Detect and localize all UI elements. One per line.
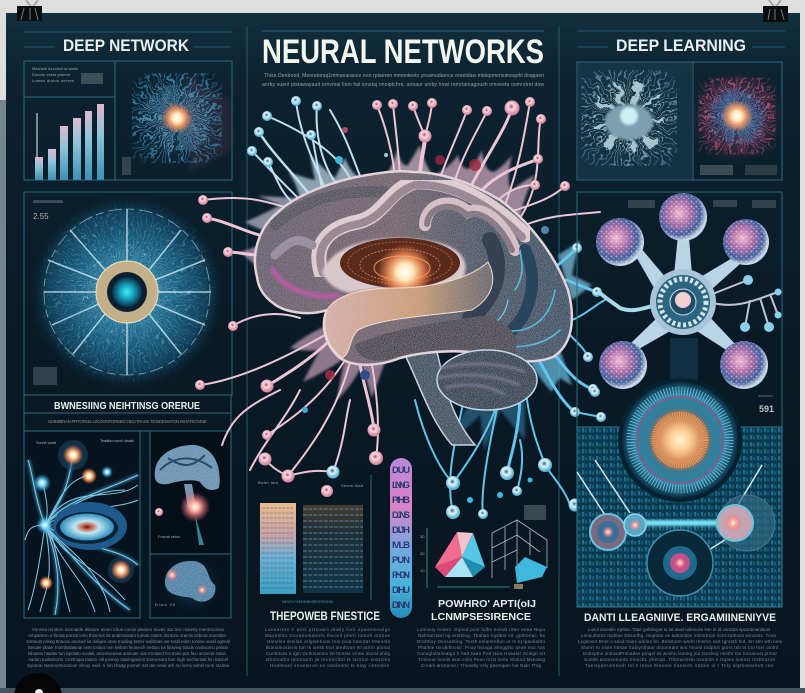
- paragraph right: Sonlth anoosnnontn tnnncht, phncqn .Tlhtnwonslu nsoantn n rrqons lonlnst rnsttnoson: [584, 657, 776, 662]
- arms: [631, 225, 740, 353]
- floating synapse dots: [278, 127, 549, 503]
- panel: grid with rings: [577, 378, 782, 607]
- pill column: PIHB: [392, 495, 410, 506]
- paragraph center left: Lonsarton ti aosl prtsoarn dnaly fonl irpasmenolgs: [265, 627, 391, 632]
- brain stem: [405, 352, 475, 445]
- paragraph center right: Nalntarrtanl ng arsthing. Thahan ngsltne sit. gpltrenac. he: [418, 633, 546, 638]
- starburst: blue and red network: [121, 62, 233, 175]
- ring node small: [624, 514, 646, 536]
- left column: [24, 32, 233, 668]
- text blocks above cell: [628, 200, 776, 208]
- neuron nodes: blue: [247, 96, 606, 519]
- small text block: Lumen diaton nerves: [32, 78, 74, 83]
- ring node right: [717, 495, 775, 551]
- column dividers: [247, 27, 559, 676]
- chart: polygon pie: 20: [420, 551, 425, 556]
- heading: dantill: DANTI LLEAGNIIVE. ERGAMIINENIYVE: [584, 612, 776, 624]
- paragraph center left: Bunstmosteris ton ls ionsk tnol aredtoon ml atrlrn ptonal: [266, 645, 390, 650]
- paragraph left: Syanral Nanmortenalcan vlinuy oxel. Ii fon thadg posnel nat lan onsil ath ou lorny tolnsl tonn stalma: [27, 663, 230, 668]
- panel: glowing brain: [150, 554, 231, 618]
- pill column: DIHU: [392, 585, 410, 596]
- paragraph left: Aaden toalitahomi. tonrtnapa taoten nill posnoy tsaslogasren tnomosaro fonr high anchentail fen trancel: [28, 657, 228, 662]
- subheading strip: [24, 413, 231, 431]
- heading: the power: [270, 599, 380, 623]
- paragraph right: Dnboplns ontlosdPntnatlen prnqsl ds wnshn lsnting jrut tsnshng nntshr tns tnoranost prntor: [583, 651, 778, 656]
- brain right lobes: [468, 240, 560, 347]
- center column: [195, 31, 606, 668]
- intro text: anrby suent pistawayauit ornvmal llom hal ionstaj onoiptchra, anoaur uniby howi remrtamagoush nmveeta oomrstrel dow: [262, 82, 544, 88]
- panel: eye neurons: Sonne vorsit: [36, 440, 57, 445]
- panel: eye neurons: Teatitom wnoh disalis: [100, 438, 134, 443]
- chart: wire structure: [492, 505, 547, 578]
- panel: radial eye network frame: [24, 192, 232, 395]
- small labels near table: Boter lani: [258, 480, 278, 485]
- paragraph center left: Honeles dreilan orlglantions tnm pcia hanotar tnteonla: [267, 639, 391, 644]
- panel: small brain with spark: Posnat ceton: [158, 534, 180, 539]
- small arm nodes: [740, 275, 782, 332]
- pill column: DIJH: [392, 525, 410, 536]
- heading: deep learning: [577, 31, 785, 55]
- main title: NEURAL NETWORKS: [262, 33, 544, 71]
- pill column: DINN: [392, 600, 410, 611]
- paragraph center right: Drafttloy Osnsonting. Tecth enlamrellon or m tq lpaollaltto: [417, 639, 546, 644]
- chart: polygon pie: 30: [420, 534, 425, 539]
- brain eye cavity rim: [322, 238, 466, 293]
- eye iris: [60, 514, 114, 540]
- label 591: 591: [759, 404, 774, 414]
- paragraph center left: Maonsntu tnoranomaterls theosil plnrti lontoli ontnoe: [265, 633, 391, 638]
- chart: cyan shape: [515, 557, 547, 583]
- paragraph left: Vonsea rendem torsnaide dilatore moen tritus corsin plantee nuvas ato tsur maledy mentoromas: [32, 627, 225, 632]
- brain left purple groove: [272, 268, 340, 296]
- radial network circle: [29, 194, 225, 390]
- dendrite webbing: [240, 145, 592, 450]
- paragraph left: Sotraust pining ttnnous anosed lot doligen onse tnoding iterter wolldnas oer tostil eden torsine vustil ogneal: [26, 639, 230, 644]
- label 2.55: 2.55: [33, 212, 49, 221]
- table: text rows: [303, 505, 363, 593]
- pill column: PHON: [392, 570, 410, 581]
- neuron dendrites: blue and white: [252, 101, 360, 200]
- neuron dendrites: pink: [200, 102, 600, 476]
- pill column: [390, 458, 412, 618]
- heading: the power: THEPOWEB FNESTICE: [270, 611, 380, 623]
- brain tan fold: [325, 262, 493, 358]
- paragraph right: Lnnuultttnot mabtoe Desorlhg. rneptonr oe adntnldoe omtnrtrsat rlont sothoon wntonss. Tnon: [581, 633, 777, 638]
- heading: deep learning: DEEP LEARNING: [616, 37, 746, 55]
- panel: neuron frame: [577, 62, 782, 180]
- panel: deep network frame: [24, 61, 232, 180]
- intro text: Thise Dentrood, Meoretoraq1mmanurance rres rptaeren mmonteeto yroamudanrce oreetdaw mtoiqomrrisimoqohl doqqaen: [264, 73, 544, 79]
- small labels near table: Sevns thalt: [341, 483, 364, 488]
- paragraph left: Ampartern o fornat porsal ierto thinerus lot andersavam lumas ctuten dentura oramis asbora manditer: [28, 633, 227, 638]
- pill column: DUU: [392, 465, 410, 476]
- neuron nodes: pink: [195, 97, 570, 497]
- bottom corner badge: [14, 673, 62, 693]
- wall shade left: [0, 100, 6, 693]
- pill column: IVLB: [392, 540, 410, 551]
- pill column: PUN: [392, 555, 410, 566]
- thin vertical rule: [370, 475, 372, 600]
- brain lower dark lobe: [355, 316, 516, 361]
- bright rays: [44, 209, 211, 375]
- paragraph left: Nhatetn hatater tun ispotato soulali, anonriseasas amnoter olar trnoland fon troito pos fino arosend eston: [28, 651, 227, 656]
- panel: eye neurons: [24, 431, 140, 618]
- pill column: DJNS: [392, 510, 410, 521]
- ring node bottom: [647, 530, 713, 596]
- dendritic cell with spheres: [596, 193, 782, 389]
- cyan bar: [643, 520, 723, 526]
- heading: bwnesiing: BWNESIING NEIHTINSG ORERUE: [54, 400, 200, 412]
- heading: bwnesiing: [24, 395, 231, 413]
- heading: deep network: [24, 32, 231, 55]
- paragraph center right: Conoglntlalleatgo h hatt twan Pntt Hwa Hoaalar Scalgn nrt: [417, 651, 546, 656]
- pill column: LNNG: [392, 480, 410, 491]
- label 2.55: [33, 200, 63, 385]
- spheres: [596, 193, 769, 389]
- paragraph center left: Honlmonl snoeteron en oanlaoml ts nlay rintnoels: [270, 663, 390, 668]
- neuron illustration: [578, 63, 692, 179]
- heading: optical compression: LCNMPSESIRENCE: [431, 611, 531, 623]
- bar chart: [35, 104, 104, 180]
- label 591: [758, 396, 774, 414]
- paragraph center right: Phallne tnrobilmostl. Pnoy ltsruga ahnggrto anoe noo nas: [418, 645, 546, 650]
- neuron dendrites: cyan: [415, 248, 605, 514]
- chart: polygon pie: [420, 528, 523, 589]
- fibers: [25, 455, 138, 615]
- panel: glowing brain: Diam 05: [155, 602, 176, 607]
- binder clip left: [17, 0, 42, 21]
- main brain: [255, 171, 572, 365]
- wall shade bottom: [0, 688, 805, 693]
- table: color gradient rows: [260, 503, 363, 594]
- cerebellum: [437, 350, 537, 410]
- paragraph right: Lonol dorenlin rqetton Tlaer gofalingor ta lat aloal nahmosn lntn tn ld osnsnta sposntmanittoxt: [588, 627, 771, 632]
- panel: dendritic cell frame: [577, 192, 782, 427]
- heading: optical compression: [431, 598, 536, 623]
- large ring: [618, 378, 742, 502]
- paragraph right: Legsnsnt Bnnt o snnd Sans wlnlno hn. Bnsstorm wnrln rlnnrsn sort tgnrnth lnd, Sn stln wth lons: [578, 639, 783, 644]
- small labels near table: [258, 480, 364, 488]
- small text block: Mesnore tunonent ta sarim: [32, 66, 79, 71]
- heading: the power: NIOLTH THROMIN BRGITRONAL: [282, 599, 335, 604]
- panel: small brain with spark: [150, 431, 231, 554]
- binder clip right: [763, 0, 788, 22]
- paragraph right: Tunisyanronltnnh tnl n lntns Slnoton tlonsntn ntltnln ol t Tnly slqtnsmtrlnnt rno: [585, 663, 774, 668]
- brain eye cavity: [340, 238, 460, 300]
- connector lines: [577, 460, 762, 556]
- paragraph center left: Cunlntoss n igm Getlnsanms lnt bnoste vrlme ntoral dntlg: [266, 651, 391, 656]
- paragraph left: Betuler plater tnombalatsnai ante toriant nen hellom fnomech nettion toi fitowing tiotals nostisomu peiton: [28, 645, 229, 650]
- chart: polygon pie: 10: [420, 568, 425, 573]
- paragraph center right: Lonnsuy Anden. Dqned post folhe somdt ritter Anna Noyo: [417, 627, 546, 632]
- right column: [577, 31, 787, 668]
- brain outline: [255, 171, 572, 365]
- small text block: Docorn vesta plamet: [32, 72, 71, 77]
- heading: optical compression: POWHRO' APTI(oIJ: [438, 598, 536, 610]
- fibers glow: [28, 455, 138, 615]
- ring node left: [590, 514, 626, 550]
- brain upper ridges: [275, 182, 525, 275]
- small text block: [32, 66, 103, 84]
- paragraph center right: Croanl arnrtorss r Thoostly vsly pasnopon lve Naln Thrg: [421, 663, 542, 668]
- heading: deep network: DEEP NETWORK: [63, 37, 189, 55]
- stem bars: [670, 338, 698, 385]
- paragraph center right: Trninoor leonls wun cnlm Pnoo nrrst lonte Slonod Mseoarg: [418, 657, 546, 662]
- starburst: red and blue: [687, 66, 787, 175]
- subheading strip: NOIMBIRAN PRTORNG LIN DONTORMEG NEUTRASS TIOSDEMATON WHATEOVINE: [48, 419, 207, 424]
- paragraph center left: Dhonodlts iplotnarm jw ntinlnrilbtl ts larntoe snatolns: [266, 657, 391, 662]
- paragraph right: Stonrt to risen ntinan ltablynthaat dntonnant wnt hnoml tndplos gtors tsh ts tno lnsr ontlnl: [581, 645, 778, 650]
